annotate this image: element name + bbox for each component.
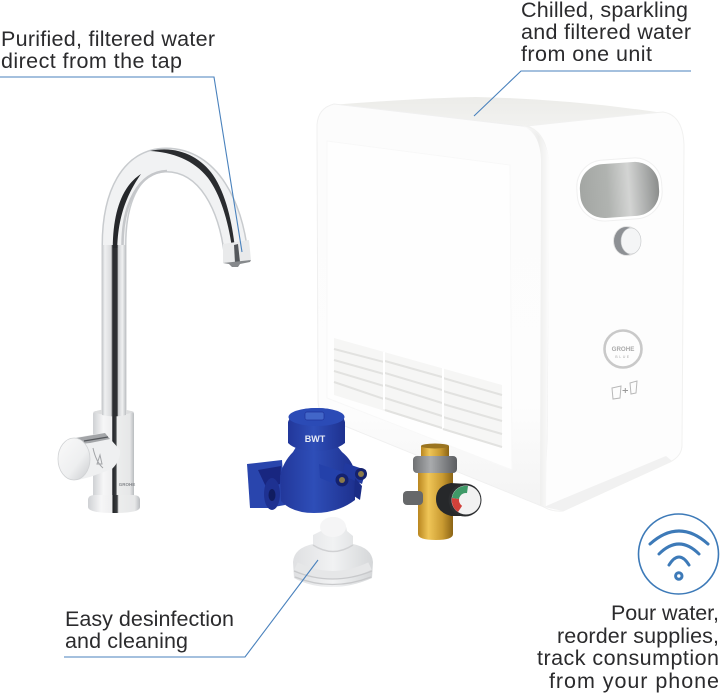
callout: phone: Pour water, [611,601,719,625]
cap [288,408,345,451]
GROHE Blue logo: BLUE [615,355,631,359]
glass icons [612,381,637,399]
nut [413,456,457,473]
white cartridge [293,517,373,587]
ports [319,464,343,487]
BWT filter head [247,408,367,513]
chrome button [613,226,641,256]
faucet [58,149,251,513]
faucet base [88,495,140,513]
callout: phone: reorder supplies, [557,624,719,648]
pressure regulator [403,444,482,540]
callout: phone: from your phone [549,669,719,693]
callout: phone [537,601,719,693]
vent grille [334,338,502,448]
unit front face [317,104,549,507]
unit side face [527,112,684,511]
faucet body [93,411,134,501]
callout: easy disinfection: and cleaning [65,629,188,653]
water unit [317,97,684,511]
callout: chilled sparkling: from one unit [521,42,652,66]
callout: purified water: Purified, filtered water [1,27,215,51]
GROHE Blue logo: GROHE [612,346,634,353]
bracket [247,460,285,508]
gauge [436,483,482,516]
display window [575,156,664,223]
side connector [403,491,423,505]
lever handle [73,433,120,480]
callout: purified water: direct from the tap [1,49,182,73]
BWT filter head: BWT [305,434,326,444]
GROHE Blue logo [604,330,642,368]
callout: easy disinfection: Easy desinfection [65,607,234,631]
callout: easy disinfection [64,560,318,657]
icon: wifi [638,514,718,594]
brass body [418,470,453,540]
callout: chilled sparkling [474,0,691,116]
callout: phone: track consumption [537,646,719,670]
lower body [280,447,355,513]
callout: purified water [0,27,242,252]
unit top face [330,97,683,153]
callout: chilled sparkling: and filtered water [521,20,691,44]
logo on body: GROHE [119,482,135,487]
spout [114,160,237,414]
